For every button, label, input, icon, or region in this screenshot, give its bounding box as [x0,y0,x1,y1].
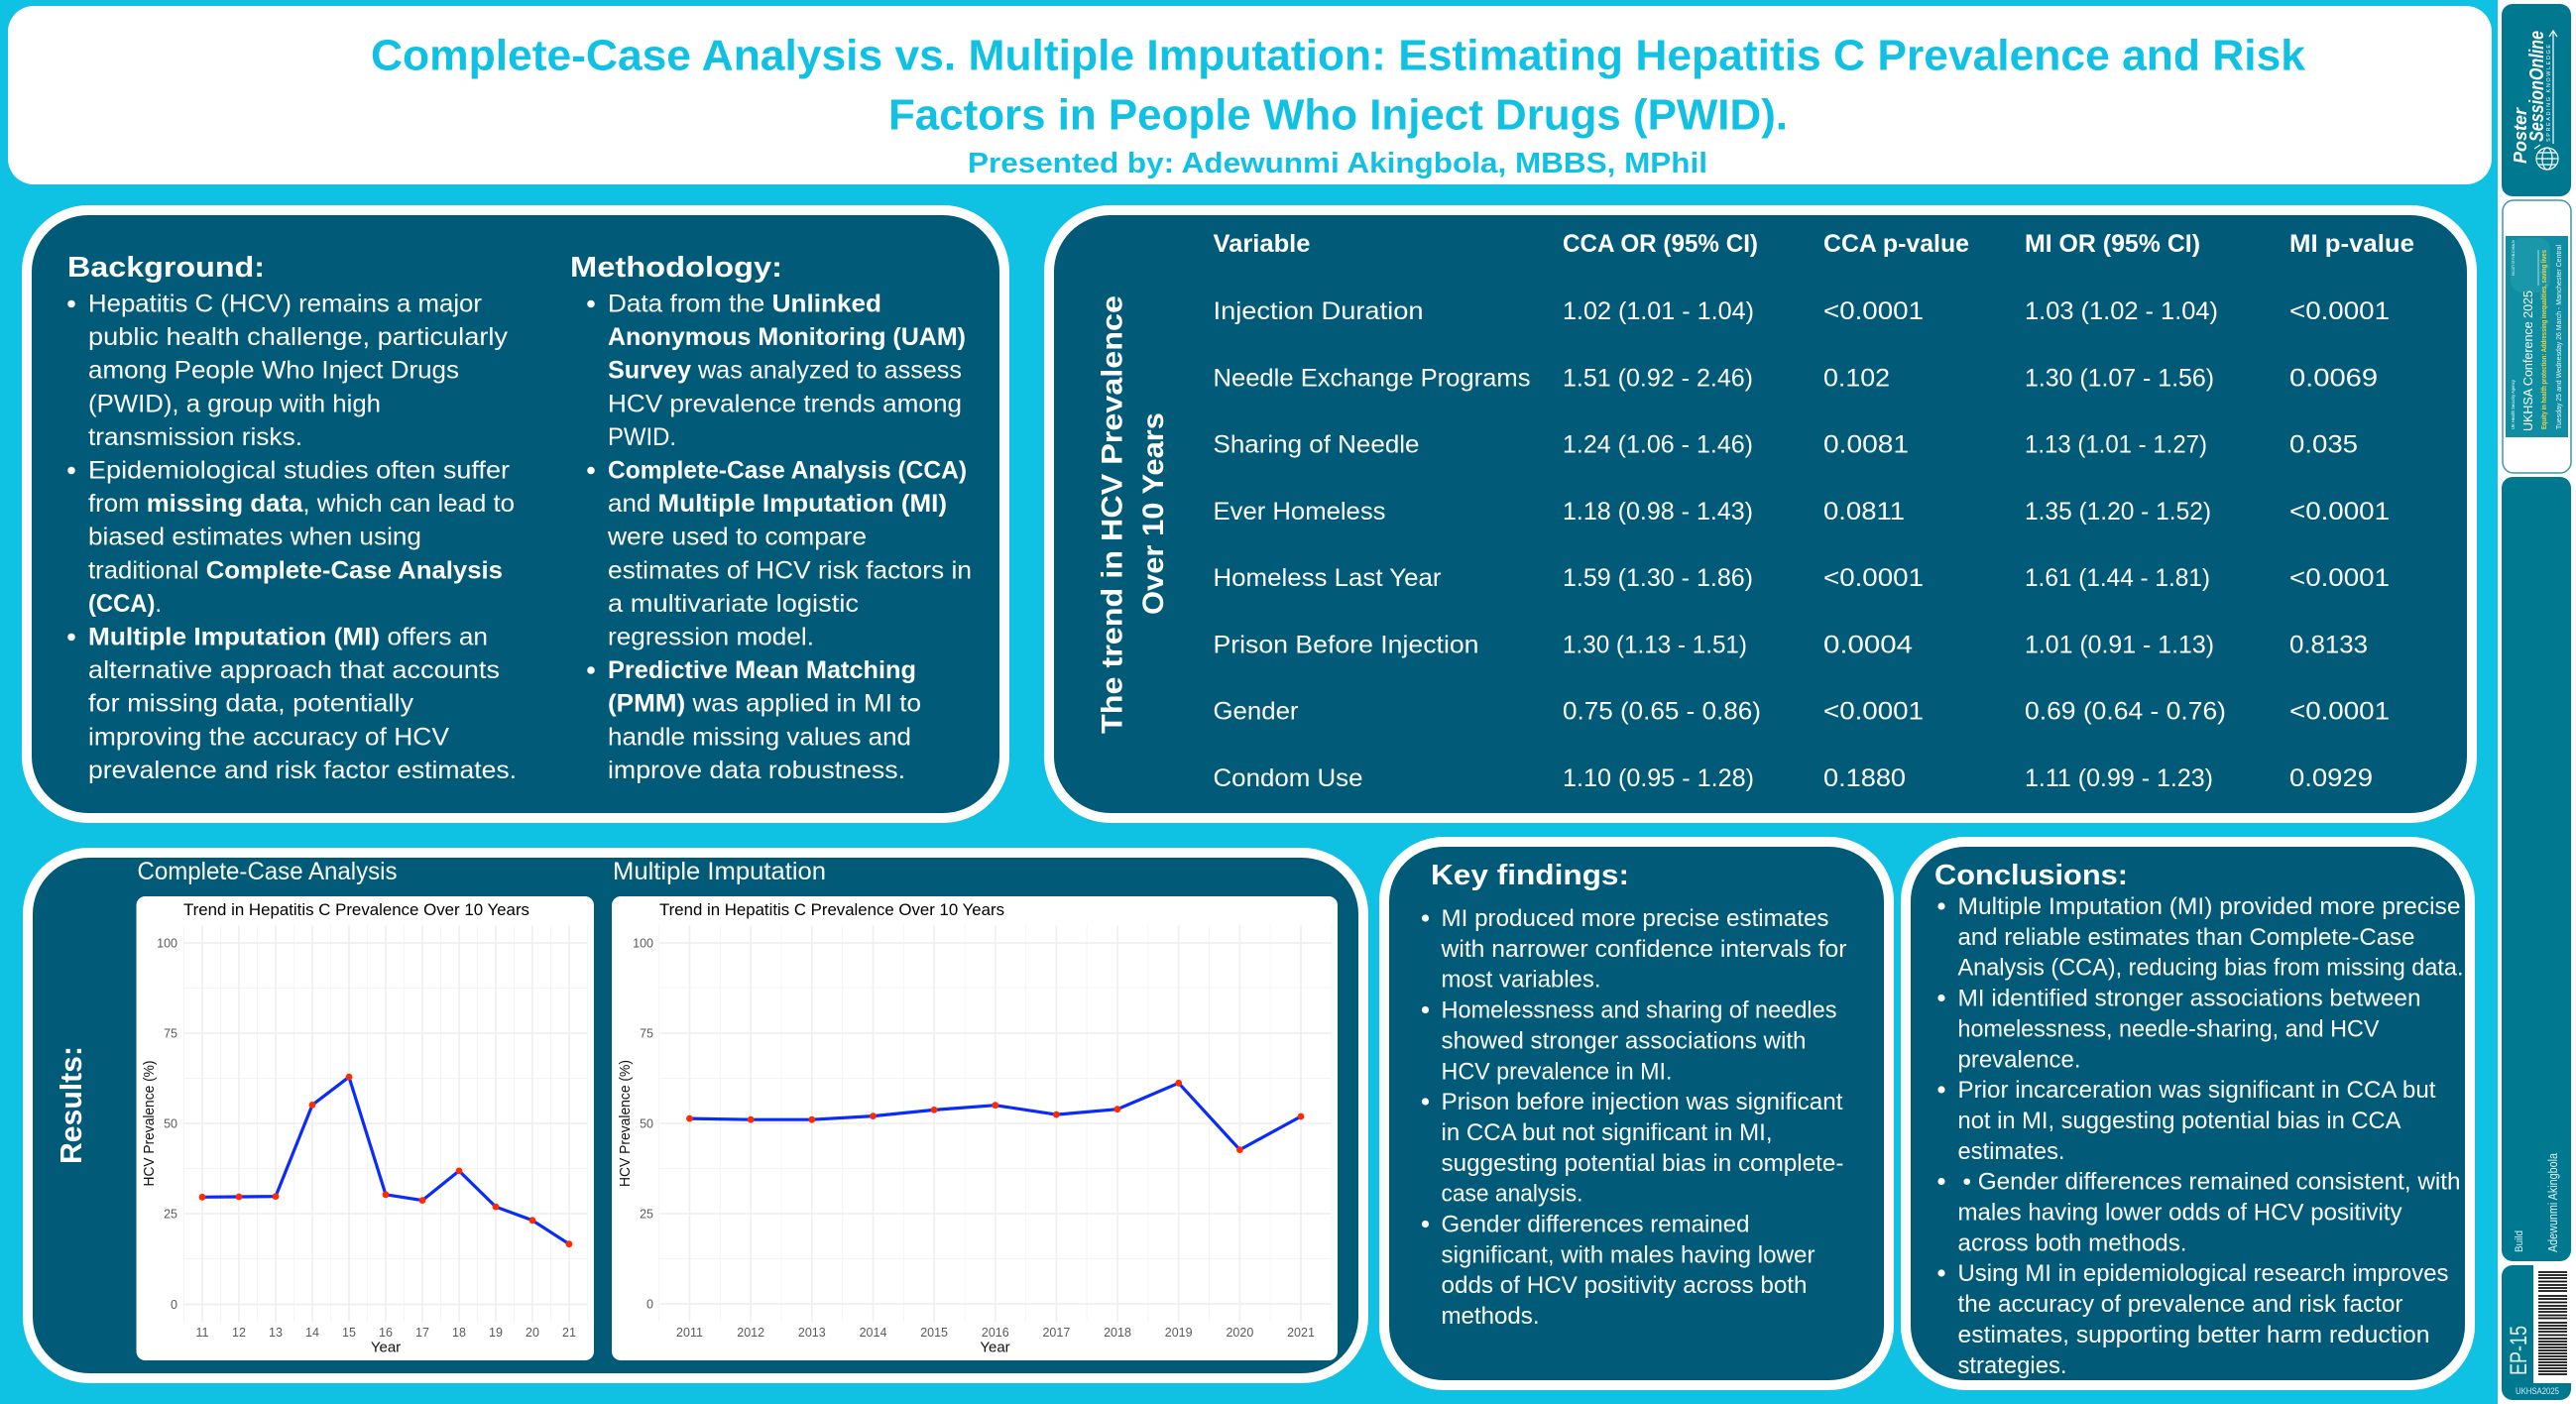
line chart: multiple imputation trend: 2013 [798,1326,826,1340]
line chart: complete-case trend: 11 [196,1326,209,1340]
icon: globe [2534,145,2558,170]
table row: injection duration: 1.02 (1.01 - 1.04) [1563,297,1754,325]
sidebar: conference banner [2503,200,2571,473]
line chart: multiple imputation trend: 50 [640,1116,653,1130]
title banner [8,6,2492,184]
line chart: multiple imputation trend: 2016 [982,1326,1009,1340]
text block: key findings bullets: Gender differences remained [1442,1212,1749,1237]
vertical table title [1097,295,1170,734]
table row: injection duration: Injection Duration [1214,297,1424,325]
heading: key findings: Key findings: [1431,860,1629,891]
text block: background bullets [67,290,517,784]
presenter: Presented by: Adewunmi Akingbola, MBBS, MPhil [968,148,1707,179]
text block: conclusions bullets: the accuracy of prevalence and risk factor [1957,1291,2403,1318]
line chart: complete-case trend [137,896,594,1360]
table row: homeless last year [1214,564,2390,592]
sidebar: author block [2502,477,2571,1261]
table row: homeless last year: <0.0001 [1823,564,1924,592]
panel: odds ratio table [1049,210,2472,818]
text block: methodology bullets [587,290,972,784]
table row: sharing of needle: 0.0081 [1823,430,1909,458]
table row: gender: <0.0001 [2289,698,2390,726]
line chart: complete-case trend: 20 [526,1326,539,1340]
table header row: Variable [1214,230,1311,258]
table row: homeless last year: 1.61 (1.44 - 1.81) [2025,564,2210,592]
sidebar: author block: Build [2514,1230,2525,1252]
text block: key findings bullets: HCV prevalence in MI. [1442,1058,1672,1085]
barcode [2538,1272,2567,1374]
chart label: complete-case: Complete-Case Analysis [137,858,397,885]
title line 2: Factors in People Who Inject Drugs (PWID). [888,91,1788,139]
table row: needle exchange programs: 0.0069 [2289,364,2378,392]
table row: gender [1214,698,2390,726]
heading: background: Background: [67,252,265,284]
line chart: complete-case trend: 25 [164,1208,177,1222]
icon: arrow [2549,31,2557,144]
text block: methodology bullets: PWID. [608,423,676,451]
table row: sharing of needle: 1.24 (1.06 - 1.46) [1563,430,1753,458]
sidebar: conference banner: UKHSA Conference 2025 [2520,291,2535,431]
table row: injection duration: <0.0001 [2289,297,2390,325]
line chart: multiple imputation trend: 2014 [860,1326,886,1340]
line chart: complete-case trend: 100 [157,936,177,950]
table row: homeless last year: Homeless Last Year [1214,564,1442,592]
line chart: multiple imputation trend: Year [980,1339,1010,1356]
text block: conclusions bullets: not in MI, suggesting potential bias in CCA [1957,1108,2401,1134]
text block: key findings bullets: most variables. [1442,967,1600,994]
text block: conclusions bullets: • Gender differences remained consistent, with [1963,1169,2461,1196]
table row: needle exchange programs: Needle Exchange Programs [1214,364,1531,392]
table row: gender: 0.69 (0.64 - 0.76) [2025,698,2226,726]
line chart: multiple imputation trend: 75 [640,1027,653,1041]
table row: injection duration [1214,297,2390,325]
text block: conclusions bullets: males having lower odds of HCV positivity [1957,1200,2401,1226]
line chart: multiple imputation trend: 2012 [737,1326,764,1340]
text block: methodology bullets: handle missing values and [608,723,911,751]
panel: background and methodology [27,210,1004,818]
table row: injection duration: <0.0001 [1823,297,1924,325]
text block: conclusions bullets: and reliable estimates than Complete-Case [1957,924,2415,951]
text block: key findings bullets: showed stronger associations with [1442,1027,1807,1054]
table row: injection duration: 1.03 (1.02 - 1.04) [2025,297,2218,325]
table row: prison before injection: 0.8133 [2289,631,2368,658]
text block: key findings bullets: odds of HCV positivity across both [1442,1272,1807,1299]
heading: methodology: Methodology: [570,252,782,284]
chart label: multiple imputation: Multiple Imputation [613,858,826,885]
text block: background bullets: prevalence and risk factor estimates. [88,757,517,784]
text block: key findings bullets: significant, with males having lower [1442,1241,1815,1268]
table row: ever homeless: 0.0811 [1823,498,1905,526]
table row: gender: Gender [1214,698,1299,726]
text block: background bullets: public health challenge, particularly [88,323,509,351]
table row: homeless last year: 1.59 (1.30 - 1.86) [1563,564,1753,592]
text block: background bullets: Hepatitis C (HCV) remains a major [88,290,482,317]
text block: conclusions bullets: estimates. [1957,1138,2064,1165]
table row: condom use [1214,764,2373,792]
text block: background bullets: (PWID), a group with high [88,390,381,417]
sidebar: poster session online logo: SessionOnline [2526,31,2548,142]
text block: background bullets: Multiple Imputation (MI) offers an [88,623,488,650]
table header row: MI p-value [2289,230,2414,258]
line chart: complete-case trend: 21 [562,1326,576,1340]
line chart: complete-case trend: 75 [164,1027,177,1041]
table row: ever homeless: 1.35 (1.20 - 1.52) [2025,498,2211,526]
heading: conclusions: Conclusions: [1934,860,2128,891]
text block: methodology bullets: Predictive Mean Matching [608,656,916,684]
table row: ever homeless [1214,498,2390,526]
table header row: MI OR (95% CI) [2025,230,2200,258]
table row: prison before injection: 1.01 (0.91 - 1.13) [2025,631,2214,658]
line chart: multiple imputation trend: 2021 [1287,1326,1315,1340]
text block: key findings bullets [1422,905,1847,1330]
table row: gender: 0.75 (0.65 - 0.86) [1563,698,1761,726]
table row: ever homeless: 1.18 (0.98 - 1.43) [1563,498,1753,526]
line chart: complete-case trend: 18 [452,1326,466,1340]
text block: key findings bullets: Prison before injection was significant [1442,1089,1843,1115]
table row: ever homeless: Ever Homeless [1214,498,1386,526]
table row: needle exchange programs: 1.30 (1.07 - 1.56) [2025,364,2214,392]
table row: prison before injection: Prison Before Injection [1214,631,1479,658]
table row: homeless last year: <0.0001 [2289,564,2390,592]
table row: needle exchange programs: 1.51 (0.92 - 2.46) [1563,364,1753,392]
table row: ever homeless: <0.0001 [2289,498,2390,526]
line chart: multiple imputation trend: 2019 [1165,1326,1193,1340]
text block: background bullets: transmission risks. [88,423,302,451]
line chart: complete-case trend: HCV Prevalence (%) [141,1061,158,1186]
text block: methodology bullets: a multivariate logistic [608,590,859,618]
sidebar: poster session online logo: SPREADING KNOWLEDGE [2546,45,2552,142]
sidebar: conference banner: UK Health Security Agency [2511,379,2516,429]
panel: conclusions [1906,842,2470,1385]
table row: sharing of needle [1214,430,2358,458]
table header row: CCA OR (95% CI) [1563,230,1758,258]
line chart: complete-case trend: 15 [342,1326,356,1340]
text block: key findings bullets: with narrower confidence intervals for [1440,936,1847,963]
table header row: CCA p-value [1823,230,1969,258]
line chart: complete-case trend: 13 [269,1326,283,1340]
sidebar: poster session online logo: Poster [2511,107,2530,164]
text block: key findings bullets: methods. [1442,1303,1539,1330]
sidebar: conference banner: Equity in health protection: Addressing inequalities, saving lives [2539,250,2548,429]
text block: methodology bullets: improve data robustness. [608,757,905,784]
line chart: complete-case trend: 12 [232,1326,246,1340]
text block: methodology bullets: estimates of HCV risk factors in [608,556,972,584]
table row: prison before injection [1214,631,2368,658]
text block: key findings bullets: case analysis. [1442,1181,1582,1208]
line chart: multiple imputation trend: 2018 [1104,1326,1131,1340]
text block: background bullets: alternative approach that accounts [88,656,500,684]
text block: background bullets: from missing data, which can lead to [88,490,515,518]
sidebar: poster session online logo [2502,4,2571,196]
text block: background bullets: improving the accuracy of HCV [88,723,449,751]
table row: sharing of needle: 0.035 [2289,430,2358,458]
line chart: complete-case trend: 14 [305,1326,319,1340]
sidebar: conference banner: Tuesday 25 and Wednesday 26 March - Manchester Central [2554,245,2563,429]
text block: conclusions bullets: estimates, supporting better harm reduction [1957,1322,2429,1348]
text block: methodology bullets: Complete-Case Analysis (CCA) [608,456,967,484]
panel: results [28,853,1363,1378]
text block: background bullets: Epidemiological studies often suffer [88,456,510,484]
text block: methodology bullets: and Multiple Imputation (MI) [608,490,947,518]
text block: conclusions bullets: Multiple Imputation (MI) provided more precise [1957,893,2461,920]
text block: conclusions bullets [1937,893,2463,1379]
text block: methodology bullets: were used to compare [607,524,867,551]
text block: key findings bullets: MI produced more precise estimates [1442,905,1828,932]
text block: conclusions bullets: prevalence. [1957,1046,2080,1073]
text block: background bullets: biased estimates when using [88,524,421,551]
line chart: multiple imputation trend: 2020 [1226,1326,1253,1340]
line chart: multiple imputation trend: 2017 [1042,1326,1070,1340]
text block: methodology bullets: HCV prevalence trends among [608,390,962,417]
text block: key findings bullets: in CCA but not significant in MI, [1442,1119,1773,1146]
line chart: multiple imputation trend: 100 [633,936,653,950]
table row: condom use: 1.11 (0.99 - 1.23) [2025,764,2213,792]
text block: methodology bullets: Anonymous Monitoring (UAM) [608,323,966,351]
line chart: complete-case trend: 16 [379,1326,393,1340]
line chart: complete-case trend: Trend in Hepatitis C Prevalence Over 10 Years [183,900,529,919]
line chart: multiple imputation trend: HCV Prevalence (%) [617,1060,634,1187]
text block: methodology bullets: Survey was analyzed to assess [608,357,962,385]
vertical table title: The trend in HCV Prevalence [1097,295,1128,734]
line chart: complete-case trend: 19 [489,1326,503,1340]
line chart: multiple imputation trend: 2011 [676,1326,703,1340]
line chart: complete-case trend: 17 [415,1326,429,1340]
text block: key findings bullets: Homelessness and sharing of needles [1442,997,1836,1024]
text block: conclusions bullets: Using MI in epidemiological research improves [1957,1260,2449,1287]
text block: background bullets: for missing data, potentially [88,690,414,718]
text block: conclusions bullets: homelessness, needle-sharing, and HCV [1957,1015,2380,1042]
text block: conclusions bullets: Analysis (CCA), reducing bias from missing data. [1957,955,2463,982]
title line 1: Complete-Case Analysis vs. Multiple Imputation: Estimating Hepatitis C Prevalence and Risk [371,32,2306,79]
text block: conclusions bullets: MI identified stronger associations between [1957,986,2421,1012]
table row: sharing of needle: Sharing of Needle [1214,430,1420,458]
panel: key findings [1384,842,1889,1385]
line chart: multiple imputation trend: 0 [646,1297,653,1311]
table row: needle exchange programs: 0.102 [1823,364,1890,392]
table row: prison before injection: 1.30 (1.13 - 1.51) [1563,631,1747,658]
text block: methodology bullets: Data from the Unlinked [608,290,881,317]
table row: prison before injection: 0.0004 [1823,631,1913,658]
vertical table title: Over 10 Years [1137,412,1170,615]
line chart: multiple imputation trend: 25 [640,1208,653,1222]
line chart: complete-case trend: Year [371,1339,401,1356]
sidebar: poster id and barcode: UKHSA2025 [2516,1386,2559,1397]
table row: needle exchange programs [1214,364,2378,392]
table row: condom use: 0.1880 [1823,764,1906,792]
text block: methodology bullets: (PMM) was applied in MI to [608,690,921,718]
table row: gender: <0.0001 [1823,698,1924,726]
text block: conclusions bullets: strategies. [1957,1352,2066,1379]
text block: key findings bullets: suggesting potential bias in complete- [1442,1150,1844,1177]
text block: conclusions bullets: across both methods. [1957,1229,2187,1256]
text block: background bullets: among People Who Inject Drugs [88,357,459,385]
table row: sharing of needle: 1.13 (1.01 - 1.27) [2025,430,2207,458]
line chart: complete-case trend: 50 [164,1116,177,1130]
line chart: multiple imputation trend [612,896,1338,1360]
sidebar: poster id and barcode: EP-15 [2506,1326,2532,1375]
line chart: multiple imputation trend: Trend in Hepatitis C Prevalence Over 10 Years [659,900,1004,919]
table row: condom use: 1.10 (0.95 - 1.28) [1563,764,1754,792]
line chart: complete-case trend: 0 [171,1298,177,1312]
sidebar: poster id and barcode [2502,1265,2576,1400]
heading: results: Results: [54,1046,88,1164]
text block: background bullets: (CCA). [88,590,162,618]
sidebar: conference banner: FACULTY OF PUBLIC HEALTH [2511,240,2516,276]
text block: conclusions bullets: Prior incarceration was significant in CCA but [1957,1077,2436,1104]
line chart: multiple imputation trend: 2015 [920,1326,948,1340]
table row: condom use: 0.0929 [2289,764,2373,792]
text block: background bullets: traditional Complete-Case Analysis [88,556,503,584]
text block: methodology bullets: regression model. [608,623,814,650]
sidebar: author block: Adewunmi Akingbola [2545,1152,2560,1252]
table header row [1214,230,2414,258]
table row: condom use: Condom Use [1214,764,1362,792]
